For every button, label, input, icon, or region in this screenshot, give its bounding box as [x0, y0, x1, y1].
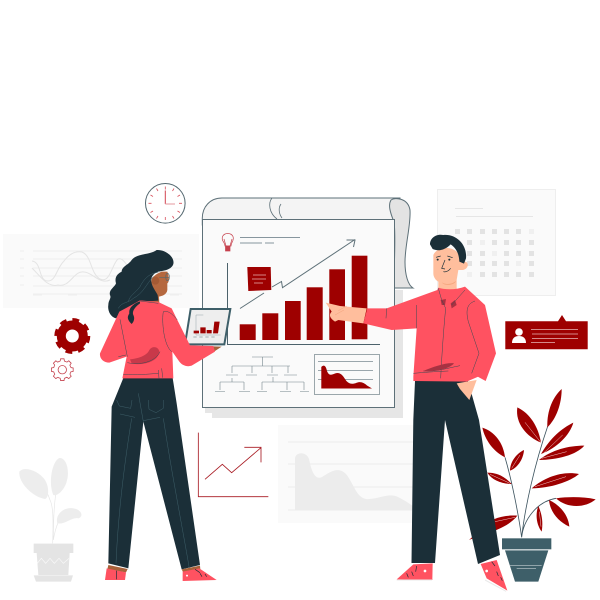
man neck and face: [433, 248, 468, 292]
plant pot: [502, 538, 551, 582]
trend arrow: [240, 240, 355, 308]
board shadow: [205, 290, 403, 418]
woman face: [147, 272, 169, 303]
board rolled corner: [390, 199, 413, 288]
figure: man pointing at the chart: [326, 235, 507, 591]
woman glasses: [159, 273, 169, 281]
woman ankles and shoes: [107, 565, 128, 572]
sticky note: [247, 267, 271, 291]
board fold: [270, 198, 282, 219]
icon: wall clock: [146, 184, 185, 223]
figure: woman holding a laptop: [100, 250, 230, 581]
board scroll header: [202, 198, 400, 225]
shirt folds: [386, 288, 479, 378]
icon: outlined red gear: [51, 359, 73, 381]
icon: user silhouette: [512, 328, 526, 343]
man right shoe: [481, 560, 507, 591]
org chart: [215, 357, 309, 392]
man pointing hand: [326, 303, 367, 323]
man hip hand: [457, 380, 477, 400]
man hair: [430, 235, 466, 264]
plant stems: [505, 400, 557, 537]
note heading lines: [240, 238, 300, 243]
icon: solid red gear: [57, 320, 88, 352]
panel: presentation flip chart board: [202, 198, 413, 418]
panel: faded calendar: [438, 190, 556, 296]
plant leaves: [469, 389, 596, 540]
icon: light bulb: [222, 234, 233, 251]
callout: user profile tag: [505, 315, 588, 349]
laptop: [185, 309, 230, 344]
woman shirt: [100, 300, 215, 378]
panel: faded area chart: [278, 425, 418, 523]
leaf highlights: [490, 422, 567, 527]
man chin shadow: [442, 281, 456, 285]
woman ear: [151, 277, 159, 285]
shirt collar: [441, 299, 457, 308]
chart axes: [228, 263, 380, 344]
plant: faded grey: [19, 458, 81, 582]
floor line: [13, 596, 590, 598]
bar chart: [240, 256, 367, 340]
mini area chart: [314, 354, 380, 394]
chart icon: red growth arrow: [198, 433, 268, 497]
man trousers: [412, 381, 500, 564]
man left shoe: [397, 560, 507, 591]
woman hair lock over shirt: [128, 301, 140, 324]
plant: red leaves in teal pot: [469, 389, 596, 582]
shirt shadow and folds: [130, 347, 159, 364]
board sheet: [202, 220, 394, 408]
callout text lines: [531, 330, 578, 342]
panel: faded line chart: [3, 234, 199, 308]
woman laptop hand: [200, 346, 222, 353]
man facial features: [436, 256, 453, 272]
man shirt: [363, 287, 496, 382]
woman hair: [108, 250, 174, 318]
woman trousers: [105, 378, 217, 581]
